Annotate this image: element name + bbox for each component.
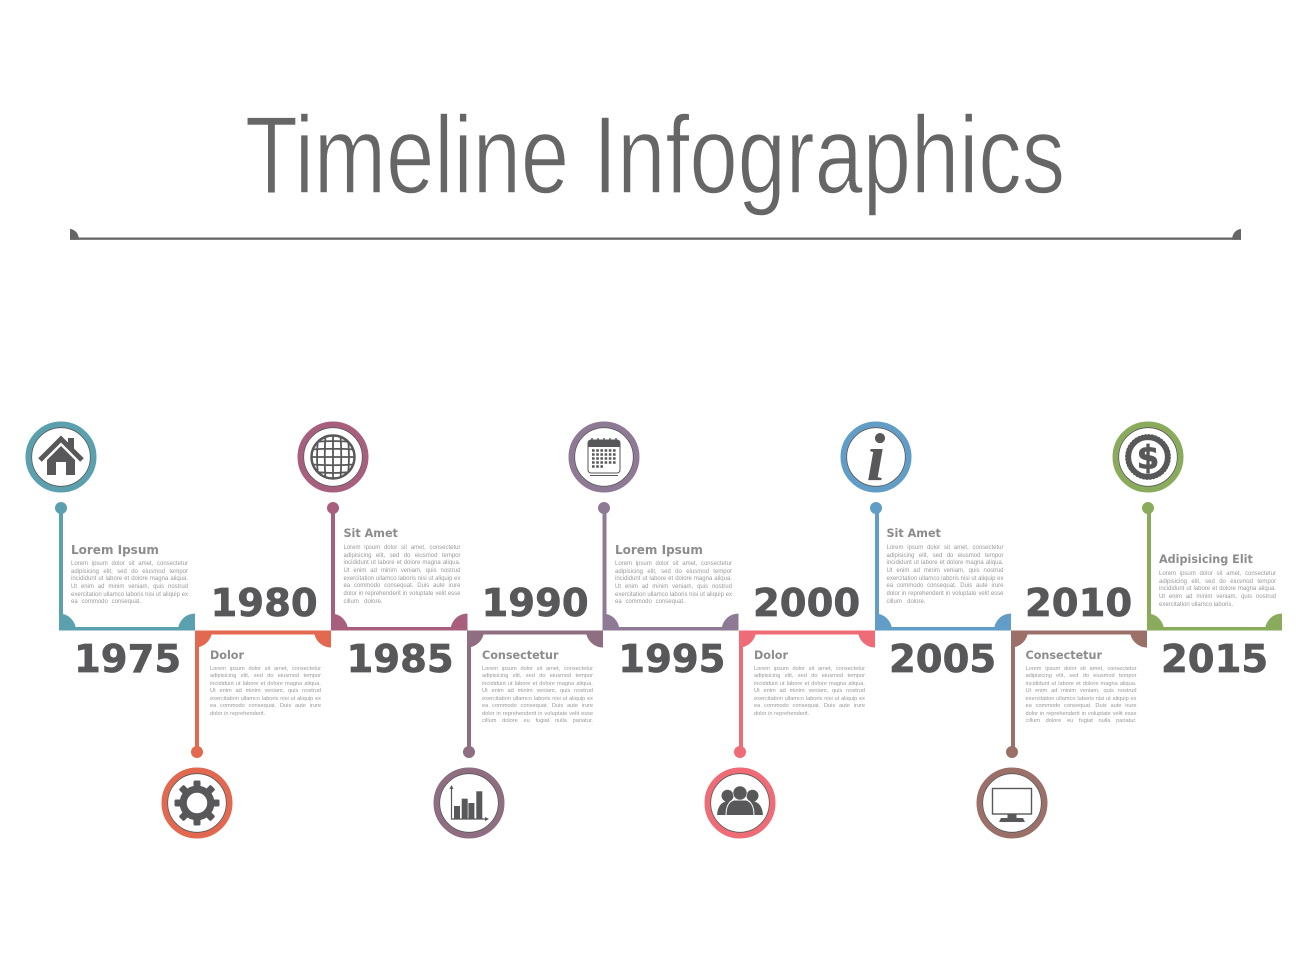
body text: ea commodo consequat. Duis aute irure [754, 703, 865, 709]
body text: exercitation ullamco laboris. [1159, 602, 1233, 608]
body text: incididunt ut labore et dolore magna aliqua. [344, 560, 460, 566]
body text: Lorem ipsum dolor sit amet, consectetur [1159, 571, 1276, 577]
icon: calendar [588, 438, 620, 476]
body text: ea commodo consequat. Duis aute irure [210, 703, 321, 709]
heading: Lorem Ipsum [615, 543, 703, 557]
connector [191, 630, 331, 758]
body text: exercitation ullamco laboris nisi ut aliquip ex [210, 696, 321, 702]
body text: ea commodo consequat. [71, 599, 141, 605]
body text [482, 666, 593, 724]
milestone: 1980 [162, 580, 331, 838]
year 2010: 2010 [1025, 580, 1132, 626]
icon: globe grid [310, 435, 354, 479]
2005 icon badge and connector [840, 419, 1011, 630]
body text: Lorem ipsum dolor sit amet, consectetur [344, 545, 460, 551]
1980 icon badge and connector [162, 630, 331, 838]
2000 icon badge and connector [704, 630, 875, 838]
year 1995: 1995 [618, 636, 725, 682]
body text: Ut enim ad minim veniam, quis nostrud [1026, 688, 1136, 694]
body text: dolor in reprehenderit in voluptate velit esse [344, 591, 460, 597]
body text: exercitation ullamco laboris nisi ut aliquip ex [615, 592, 732, 598]
body text: ea commodo consequat. Duis aute irure [1026, 703, 1136, 709]
heading: Lorem Ipsum [71, 543, 159, 557]
body text: incididunt ut labore et dolore magna aliqua. [1159, 586, 1276, 592]
year 2000: 2000 [753, 580, 860, 626]
badge ring [708, 770, 772, 836]
body text: Lorem ipsum dolor sit amet, consectetur [71, 561, 188, 567]
1975 icon badge and connector [26, 422, 195, 630]
body text: ea commodo consequat. Duis aute irure [886, 583, 1004, 589]
body text: incididunt ut labore et dolore magna aliqua. [754, 680, 865, 686]
body text: exercitation ullamco laboris nisi ut aliquip ex [886, 576, 1004, 582]
body text: adipisicing elit, sed do eiusmod tempor [754, 673, 865, 679]
heading: Adipisicing Elit [1159, 553, 1253, 566]
body text: Lorem ipsum dolor sit amet, consectetur [1026, 666, 1136, 672]
body text: dolor in reprehenderit. [754, 710, 809, 716]
body text: incididunt ut labore et dolore magna aliqua. [1026, 680, 1136, 686]
body text [210, 666, 321, 716]
2015 icon badge and connector [1112, 422, 1282, 630]
body text: Ut enim ad minim veniam, quis nostrud [210, 688, 321, 694]
body text: adipisicing elit, sed do eiusmod tempor [344, 553, 460, 559]
1985 icon badge and connector [298, 422, 468, 630]
year 1985: 1985 [346, 636, 454, 682]
badge ring [844, 424, 908, 490]
body text: dolor in reprehenderit in voluptate velit esse [886, 591, 1004, 597]
heading: Dolor [210, 649, 244, 662]
connector [462, 630, 602, 758]
connector [326, 502, 467, 630]
milestone: 2015 [1112, 422, 1282, 682]
body text: ea commodo consequat. [615, 599, 685, 605]
body text: adipisicing elit, sed do eiusmod tempor [71, 569, 188, 575]
milestone: 1975 [26, 422, 195, 682]
body text: adipisicing elit, sed do eiusmod tempor [210, 673, 321, 679]
body text: Ut enim ad minim veniam, quis nostrud [615, 584, 732, 590]
body text: Lorem ipsum dolor sit amet, consectetur [886, 545, 1004, 551]
2010 icon badge and connector [976, 630, 1147, 838]
icon: dollar coin [1126, 435, 1170, 479]
body text [1159, 570, 1276, 608]
body text: Lorem ipsum dolor sit amet, consectetur [754, 666, 865, 672]
body text: dolor in reprehenderit. [210, 710, 265, 716]
body text [615, 560, 732, 605]
body text: dolor in reprehenderit in voluptate velit esse [1026, 710, 1136, 716]
body text: adipisicing elit, sed do eiusmod tempor [886, 553, 1004, 559]
icon: gear [174, 780, 220, 826]
body text: exercitation ullamco laboris nisi ut aliquip ex [754, 696, 865, 702]
body text: Ut enim ad minim veniam, quis nostrud [754, 688, 865, 694]
body text: exercitation ullamco laboris nisi ut aliquip ex [344, 576, 460, 582]
year 2005: 2005 [889, 636, 996, 682]
milestone: 1985 [298, 422, 468, 682]
heading: Consectetur [1026, 649, 1102, 662]
icon: people [717, 786, 763, 816]
body text: cillum dolore. [344, 599, 382, 605]
body text: adipisicing elit, sed do eiusmod tempor [482, 673, 593, 679]
badge ring [980, 770, 1044, 836]
body text: Ut enim ad minim veniam, quis nostrud [71, 584, 188, 590]
body text: cillum dolore. [886, 599, 926, 605]
heading: Sit Amet [344, 527, 398, 540]
body text [754, 666, 865, 716]
body text: adipisicing elit, sed do eiusmod tempor [615, 569, 732, 575]
badge ring [28, 424, 94, 490]
icon: bar chart [449, 785, 488, 821]
body text: incididunt ut labore et dolore magna aliqua. [615, 576, 732, 582]
badge ring [164, 770, 230, 836]
year 1980: 1980 [210, 580, 318, 626]
badge ring [572, 424, 637, 490]
badge ring [300, 424, 365, 490]
body text: Lorem ipsum dolor sit amet, consectetur [482, 666, 593, 672]
badge ring [1116, 424, 1180, 490]
body text: Ut enim ad minim veniam, quis nostrud [344, 568, 460, 574]
body text: adipisicing elit, sed do eiusmod tempor [1026, 673, 1136, 679]
body text: incididunt ut labore et dolore magna aliqua. [482, 680, 593, 686]
title: Timeline Infographics [245, 94, 1065, 217]
body text: adipisicing elit, sed do eiusmod tempor [1159, 579, 1276, 585]
body text: cillum dolore eu fugiat nulla pariatur. [482, 718, 593, 724]
milestone: 2000 [704, 580, 875, 838]
connector [1142, 502, 1282, 630]
icon: dollar coin: $ [1137, 438, 1159, 476]
icon: info: i [867, 419, 886, 495]
body text: incididunt ut labore et dolore magna aliqua. [210, 680, 321, 686]
year 1975: 1975 [74, 636, 181, 682]
body text: dolor in reprehenderit in voluptate velit esse [482, 710, 593, 716]
body text: Lorem ipsum dolor sit amet, consectetur [210, 666, 321, 672]
body text: Ut enim ad minim veniam, quis nostrud [1159, 594, 1276, 600]
body text [1026, 666, 1136, 724]
connector [870, 502, 1011, 630]
body text: Lorem ipsum dolor sit amet, consectetur [615, 561, 732, 567]
body text: Ut enim ad minim veniam, quis nostrud [886, 568, 1004, 574]
connector [734, 630, 875, 758]
body text: ea commodo consequat. Duis aute irure [482, 703, 593, 709]
body text: exercitation ullamco laboris nisi ut aliquip ex [482, 696, 593, 702]
heading: Sit Amet [886, 527, 941, 540]
body text: incididunt ut labore et dolore magna aliqua. [886, 560, 1004, 566]
title underline [70, 229, 1241, 240]
milestone: 1990 [434, 580, 603, 838]
icon: house [40, 438, 82, 475]
heading: Dolor [754, 649, 788, 662]
connector [598, 502, 739, 630]
year 2015: 2015 [1161, 636, 1268, 682]
icon: monitor [992, 788, 1032, 822]
body text: Ut enim ad minim veniam, quis nostrud [482, 688, 593, 694]
body text: incididunt ut labore et dolore magna aliqua. [71, 576, 188, 582]
body text: exercitation ullamco laboris nisi ut aliquip ex [1026, 696, 1136, 702]
connector [55, 502, 195, 630]
body text: ea commodo consequat. Duis aute irure [344, 583, 460, 589]
milestone: 1995 [568, 422, 738, 682]
body text [71, 560, 188, 605]
1995 icon badge and connector [568, 422, 738, 630]
heading: Consectetur [482, 649, 559, 662]
year 1990: 1990 [482, 580, 589, 626]
1990 icon badge and connector [434, 630, 603, 838]
body text: cillum dolore eu fugiat nulla pariatur. [1026, 718, 1136, 724]
connector [1006, 630, 1147, 758]
milestone: 2005 [840, 419, 1011, 682]
body text [886, 544, 1004, 605]
body text: exercitation ullamco laboris nisi ut aliquip ex [71, 592, 188, 598]
badge ring [436, 770, 501, 836]
body text [344, 544, 460, 605]
milestone: 2010 [976, 580, 1147, 838]
